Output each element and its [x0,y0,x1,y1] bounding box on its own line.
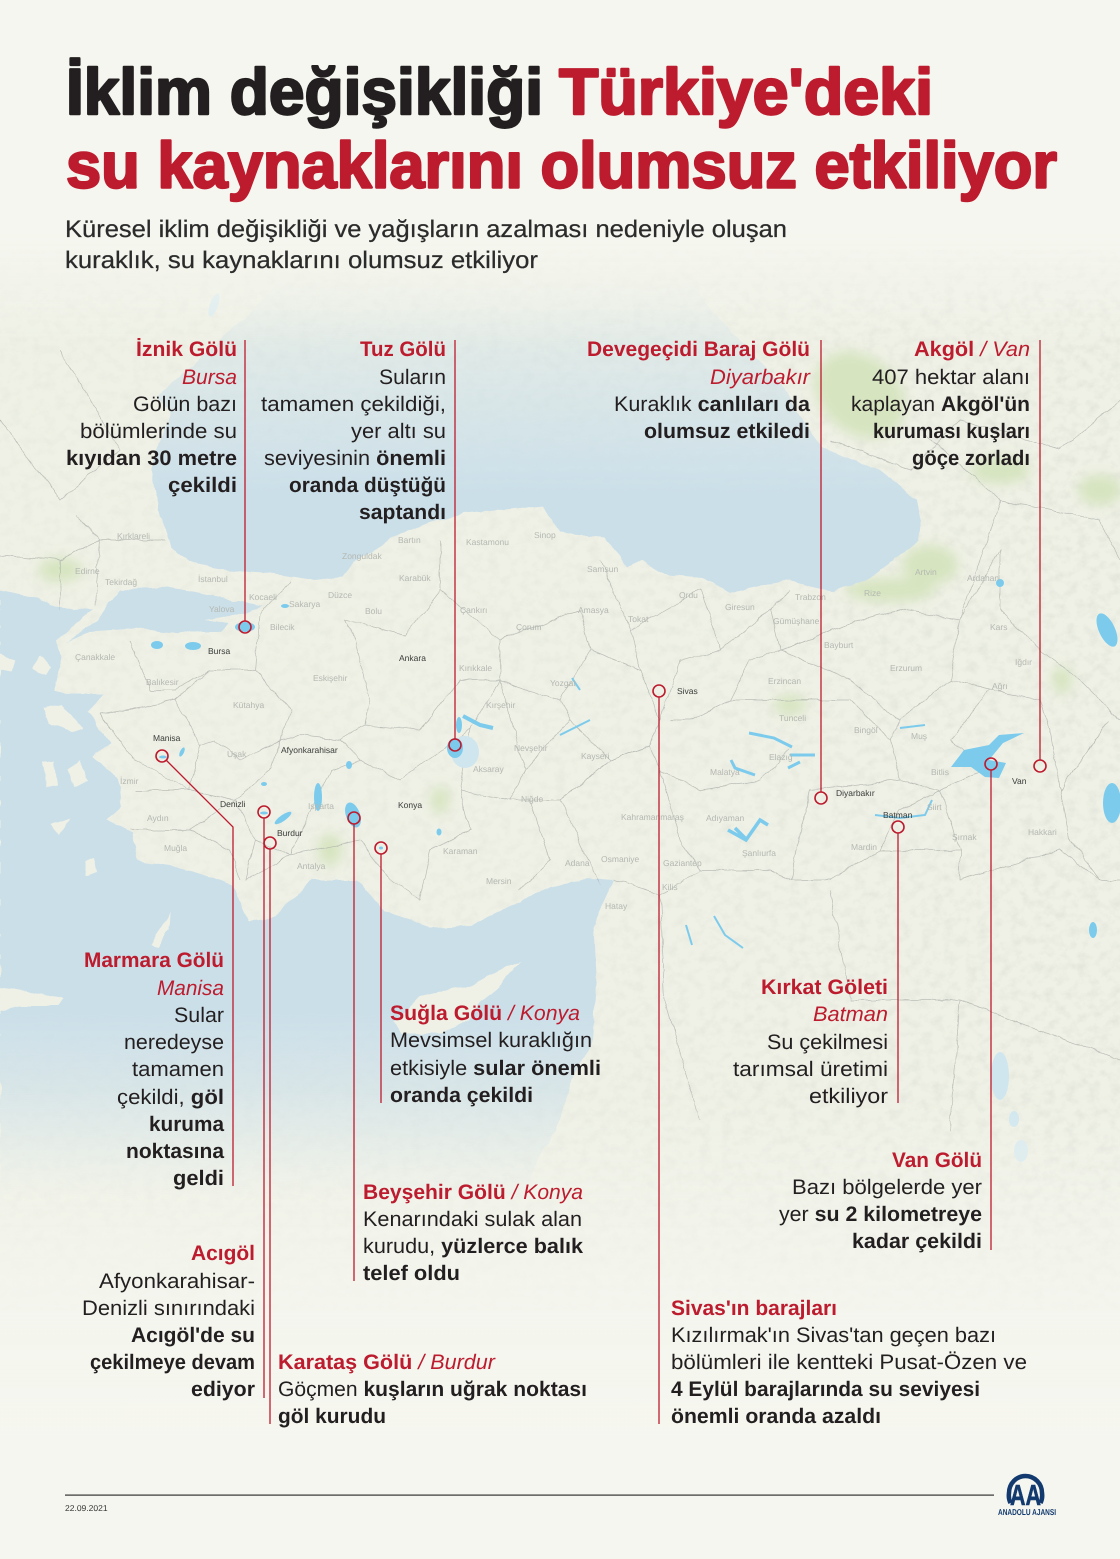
callout: Van Gölü [779,758,997,1253]
text: Van Gölü [892,1149,982,1172]
text: göl kurudu [278,1405,386,1428]
text: Beyşehir Gölü / Konya [363,1181,583,1204]
primary city labels [153,646,1027,838]
secondary city labels: Muğla [164,843,187,853]
leader and marker [375,842,387,1103]
text [733,976,888,1108]
text [278,1351,587,1428]
callout: Acıgöl [82,806,270,1401]
secondary city labels: Niğde [521,794,543,804]
secondary city labels: Mardin [851,842,877,852]
secondary city labels: Gaziantep [663,858,702,868]
text: çekildi [168,474,237,497]
text: göçe zorladı [912,447,1030,470]
secondary city labels: Samsun [587,564,618,574]
callout: Tuz Gölü [261,338,461,751]
secondary city labels: Nevşehir [514,743,548,753]
secondary city labels: Kırşehir [486,700,515,710]
secondary city labels: Giresun [725,602,755,612]
title [66,55,1057,202]
primary city labels: Batman [883,810,913,820]
text [779,1149,982,1253]
secondary city labels: Sakarya [289,599,320,609]
text: Kuraklık canlıları da [614,393,810,416]
title: İklim değişikliği [66,55,543,128]
secondary city labels: Gümüşhane [773,616,820,626]
text: neredeyse [124,1031,224,1054]
text: Bazı bölgelerde yer [792,1176,982,1199]
text: Sivas'ın barajları [671,1297,837,1320]
text: Bursa [182,366,237,389]
primary city labels: Konya [398,800,422,810]
leader and marker [1034,340,1046,772]
callout: Akgöl [851,338,1046,772]
text: Devegeçidi Baraj Gölü [587,338,810,361]
secondary city labels: Hakkari [1028,827,1057,837]
text: bölümleri ile kentteki Pusat-Özen ve [671,1351,1027,1374]
islands [0,655,521,1034]
text: olumsuz etkiledi [644,420,810,443]
secondary city labels: Kilis [662,882,678,892]
text: Tuz Gölü [360,338,446,361]
text: Mevsimsel kuraklığın [390,1029,592,1052]
text: Su çekilmesi [767,1031,888,1054]
text [587,338,811,443]
secondary city labels: Şırnak [952,832,977,842]
secondary city labels: Antalya [297,861,326,871]
secondary city labels: Rize [864,588,881,598]
date: 22.09.2021 [65,1503,108,1513]
lakes and dam reservoirs [151,292,1120,1162]
text [82,1242,255,1401]
secondary city labels: Tekirdağ [105,577,137,587]
text: Sular [174,1004,224,1027]
text [261,338,446,524]
secondary city labels: Kastamonu [466,537,509,547]
text: noktasına [126,1140,224,1163]
leader and marker [892,821,904,1103]
text: bölümlerinde su [80,420,237,443]
text: Akgöl / Van [914,338,1030,361]
text: Manisa [157,977,224,1000]
secondary city labels: Ordu [679,590,698,600]
secondary city labels: Kırıkkale [459,663,492,673]
secondary city labels: Adıyaman [706,813,745,823]
text: oranda düştüğü [289,474,446,497]
callout: Beyşehir Gölü [348,812,583,1285]
primary city labels: Afyonkarahisar [281,745,338,755]
secondary city labels: Siirt [927,802,942,812]
logo: Anadolu Ajansı [998,1476,1056,1517]
primary city labels: Manisa [153,733,181,743]
title: su kaynaklarını olumsuz etkiliyor [66,128,1057,202]
text: Suların [379,366,446,389]
secondary city labels: Malatya [710,767,740,777]
logo: Anadolu Ajansı: AA [1010,1480,1041,1512]
secondary city labels: Kütahya [233,700,264,710]
secondary city labels: Hatay [605,901,628,911]
secondary city labels: Tunceli [779,713,806,723]
secondary city labels: Trabzon [795,592,826,602]
fade overlays [0,230,1120,350]
province borders [0,350,1120,1130]
text: Denizli sınırındaki [82,1297,255,1320]
secondary city labels [75,530,1057,911]
callout: Karataş Gölü [264,837,587,1428]
secondary city labels: Bolu [365,606,382,616]
subtitle [65,216,787,274]
secondary city labels: Erzurum [890,663,922,673]
text: tamamen [132,1058,224,1081]
text: kaplayan Akgöl'ün [851,393,1030,416]
leader and marker [258,806,270,1398]
secondary city labels: Yozgat [550,678,576,688]
logo: Anadolu Ajansı: ANADOLU AJANSI [998,1507,1056,1517]
secondary city labels: Artvin [915,567,937,577]
text: Batman [813,1003,888,1026]
leader and marker [985,758,997,1250]
text: tarımsal üretimi [733,1058,888,1081]
secondary city labels: Sinop [534,530,556,540]
footer rule [65,1494,994,1496]
secondary city labels: Kayseri [581,751,609,761]
secondary city labels: Isparta [308,801,334,811]
text: Göçmen kuşların uğrak noktası [278,1378,587,1401]
text: Kızılırmak'ın Sivas'tan geçen bazı [671,1324,996,1347]
text: Gölün bazı [133,393,237,416]
primary city labels: Sivas [677,686,698,696]
text: kıyıdan 30 metre [66,447,237,470]
subtitle: kuraklık, su kaynaklarını olumsuz etkiliyor [65,247,538,274]
text: 4 Eylül barajlarında su seviyesi [671,1378,980,1401]
text: ediyor [191,1378,255,1401]
secondary city labels: Zonguldak [342,551,382,561]
secondary city labels: Düzce [328,590,352,600]
text: Marmara Gölü [84,949,224,972]
secondary city labels: Bingöl [854,725,878,735]
secondary city labels: Balıkesir [146,677,179,687]
callout: Marmara Gölü [84,750,233,1190]
leader and marker [264,837,276,1424]
text [66,338,237,497]
secondary city labels: İstanbul [198,574,228,584]
Aegean and Mediterranean [0,590,614,1210]
map of Türkiye [0,230,1120,1460]
callout: Devegeçidi Baraj Gölü [587,338,827,804]
secondary city labels: Ağrı [992,681,1008,691]
secondary city labels: Çanakkale [75,652,115,662]
secondary city labels: Ardahan [967,573,999,583]
secondary city labels: Karabük [399,573,431,583]
land base [0,230,1120,1460]
title: Türkiye'deki [559,55,933,128]
vegetation patches [38,334,1120,866]
secondary city labels: Amasya [578,605,609,615]
text: etkiliyor [809,1085,888,1108]
primary city labels: Ankara [399,653,426,663]
secondary city labels: Elazığ [769,752,793,762]
primary city labels: Burdur [277,828,303,838]
secondary city labels: Bayburt [824,640,854,650]
text: kuruma [149,1113,224,1136]
text: oranda çekildi [390,1084,533,1107]
secondary city labels: Eskişehir [313,673,348,683]
text: tamamen çekildiği, [261,393,446,416]
secondary city labels: Iğdır [1015,657,1032,667]
text: 407 hektar alanı [872,366,1030,389]
callout: Sivas'ın barajları [653,685,1027,1428]
callout: İznik Gölü [66,338,251,633]
text: çekildi, göl [117,1086,224,1109]
secondary city labels: Çorum [516,622,542,632]
primary city labels: Denizli [220,799,246,809]
secondary city labels: Karaman [443,846,478,856]
secondary city labels: Çankırı [460,605,487,615]
secondary city labels: Edirne [75,566,100,576]
secondary city labels: Muş [911,731,927,741]
text: çekilmeye devam [90,1351,255,1374]
secondary city labels: Aydın [147,813,169,823]
leader and marker [156,750,233,1186]
secondary city labels: Osmaniye [601,854,640,864]
secondary city labels: Yalova [209,604,235,614]
text: yer su 2 kilometreye [779,1203,982,1226]
Sea of Marmara [66,587,264,642]
secondary city labels: Bilecik [270,622,295,632]
secondary city labels: İzmir [120,776,139,786]
text: Kenarındaki sulak alan [363,1208,582,1231]
text [671,1297,1027,1428]
leader and marker [449,340,461,751]
secondary city labels: Uşak [227,749,247,759]
terrain relief [673,334,1120,1150]
text [84,949,224,1190]
text: etkisiyle sular önemli [390,1057,601,1080]
primary city labels: Bursa [208,646,230,656]
text: yer altı su [351,420,446,443]
leader and marker [653,685,665,1424]
text: saptandı [359,501,446,524]
text: önemli oranda azaldı [671,1405,881,1428]
text [390,1002,601,1107]
text: kadar çekildi [852,1230,982,1253]
Black Sea [150,260,921,592]
leader and marker [348,812,360,1281]
callout: Kırkat Göleti [733,821,904,1108]
text: kuruması kuşları [873,420,1030,443]
text: Acıgöl [191,1242,255,1265]
secondary city labels: Bartın [398,535,421,545]
text: Karataş Gölü / Burdur [278,1351,496,1374]
text [363,1181,583,1285]
text: Afyonkarahisar- [99,1270,255,1293]
secondary city labels: Erzincan [768,676,801,686]
leader and marker [815,340,827,804]
text: Diyarbakır [710,366,811,389]
primary city labels: Diyarbakır [836,788,875,798]
text [851,338,1030,470]
secondary city labels: Mersin [486,876,512,886]
secondary city labels: Aksaray [473,764,504,774]
leader and marker [239,340,251,633]
text: seviyesinin önemli [264,447,446,470]
secondary city labels: Şanlıurfa [742,848,776,858]
text: geldi [173,1167,224,1190]
text: kurudu, yüzlerce balık [363,1235,583,1258]
text: telef oldu [363,1262,460,1285]
text: Suğla Gölü / Konya [390,1002,580,1025]
text: Acıgöl'de su [131,1324,255,1347]
seas [0,260,921,1210]
secondary city labels: Kocaeli [249,592,277,602]
secondary city labels: Bitlis [931,767,949,777]
primary city labels: Van [1012,776,1027,786]
text: Kırkat Göleti [761,976,888,999]
secondary city labels: Kars [990,622,1007,632]
subtitle: Küresel iklim değişikliği ve yağışların azalması nedeniyle oluşan [65,216,787,243]
secondary city labels: Kırklareli [117,531,150,541]
secondary city labels: Tokat [628,614,649,624]
secondary city labels: Adana [565,858,590,868]
secondary city labels: Kahramanmaraş [621,812,684,822]
text: İznik Gölü [136,338,237,361]
callout: Suğla Gölü [375,842,601,1107]
